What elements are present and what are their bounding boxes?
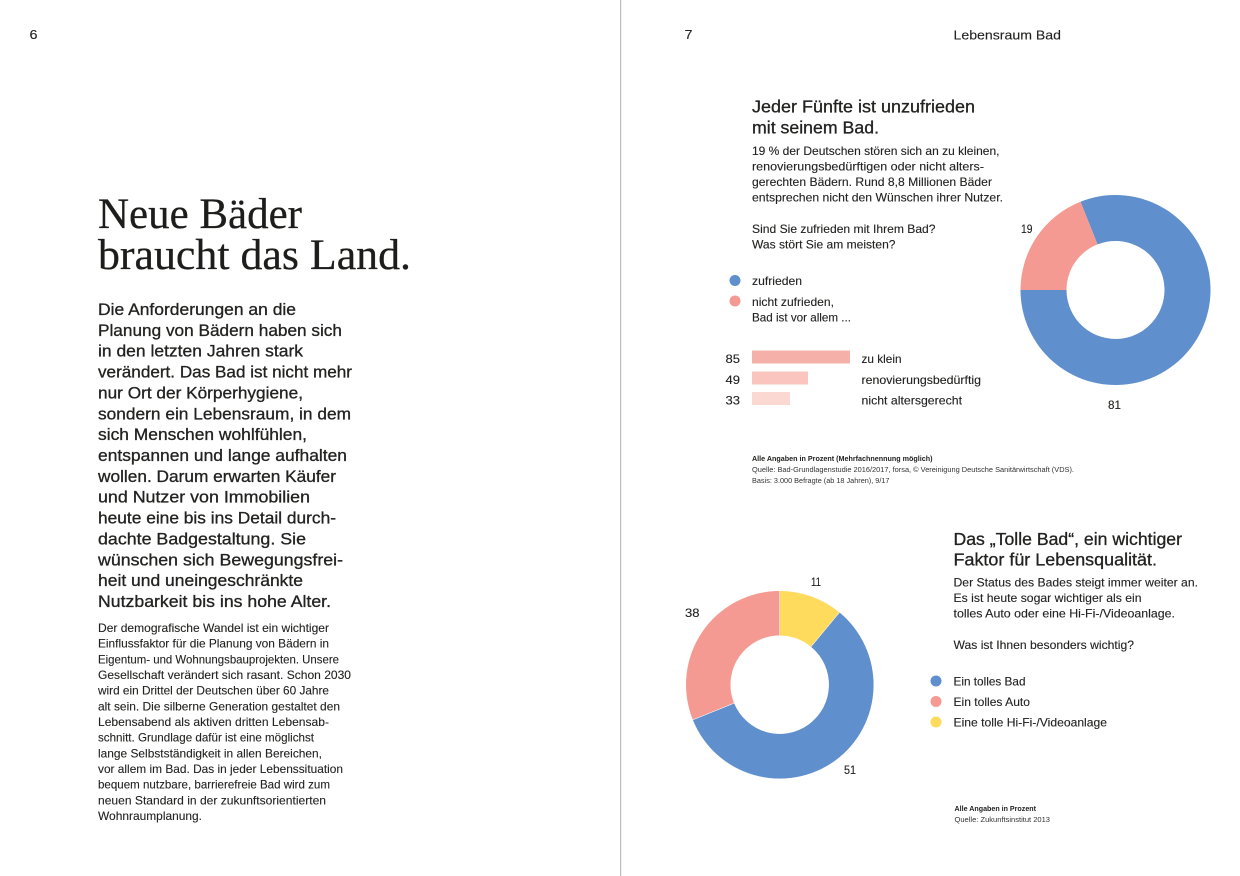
- page number 6: 6: [30, 27, 38, 42]
- description text: [954, 576, 1198, 620]
- body text block: Lebensabend als aktiven dritten Lebensab-: [98, 716, 329, 729]
- intro text block: heute eine bis ins Detail durch-: [98, 510, 336, 528]
- legend: Ein tolles Bad: [954, 674, 1026, 688]
- intro text block: sich Menschen wohlfühlen,: [98, 426, 307, 444]
- bar chart: [726, 350, 981, 408]
- heading: Jeder Fünfte: mit seinem Bad.: [752, 118, 879, 138]
- description text: renovierungsbedürftigen oder nicht alters-: [752, 160, 984, 174]
- bar chart: zu klein: [862, 352, 902, 366]
- body text block: Einflussfaktor für die Planung von Bädern in: [98, 638, 329, 651]
- body text block: vor allem im Bad. Das in jeder Lebenssituation: [98, 763, 343, 776]
- source note: Alle Angaben in Prozent (Mehrfachnennung möglich): [752, 456, 932, 463]
- running header: Lebensraum Bad: [954, 28, 1061, 42]
- description text: tolles Auto oder eine Hi-Fi-/Videoanlage.: [954, 606, 1175, 620]
- description text: entsprechen nicht den Wünschen ihrer Nutzer.: [752, 190, 1003, 204]
- source note: Basis: 3.000 Befragte (ab 18 Jahren), 9/17: [752, 478, 890, 485]
- intro text block: wünschen sich Bewegungsfrei-: [97, 551, 343, 569]
- description text: Der Status des Bades steigt immer weiter an.: [954, 576, 1198, 590]
- source note: [954, 806, 1050, 824]
- bar chart: 49: [726, 373, 740, 387]
- body text block: wird ein Drittel der Deutschen über 60 Jahre: [97, 685, 329, 698]
- heading: Jeder Fünfte: [752, 97, 975, 138]
- source note: [752, 456, 1074, 485]
- source note: Quelle: Zukunftsinstitut 2013: [954, 817, 1050, 824]
- bar chart: nicht altersgerecht: [862, 394, 963, 408]
- intro text block: heit und uneingeschränkte: [98, 572, 303, 590]
- heading: Das Tolle Bad: Faktor für Lebensqualität.: [954, 550, 1157, 570]
- donut chart: [685, 575, 874, 779]
- body text block: Der demografische Wandel ist ein wichtiger: [98, 622, 329, 635]
- body text block: schnitt. Grundlage dafür ist eine möglichst: [98, 732, 315, 745]
- description text: [752, 144, 1003, 204]
- body text block: neuen Standard in der zukunftsorientierten: [98, 794, 326, 807]
- title: Neue Bäder: [98, 191, 302, 238]
- description text: gerechten Bädern. Rund 8,8 Millionen Bäder: [752, 175, 992, 189]
- bar chart: renovierungsbedürftig: [862, 373, 981, 387]
- body text block: Eigentum- und Wohnungsbauprojekten. Unsere: [98, 653, 339, 666]
- intro text block: [97, 301, 353, 611]
- survey question: Was stört Sie am meisten?: [752, 238, 896, 252]
- panel: Jeder Fünfte: [726, 97, 1210, 485]
- donut chart: 19: [1021, 222, 1033, 236]
- body text block: Gesellschaft verändert sich rasant. Schon 2030: [98, 669, 351, 682]
- legend: zufrieden: [752, 274, 802, 288]
- body text block: bequem nutzbare, barrierefreie Bad wird zum: [98, 779, 330, 792]
- survey question: Was ist Ihnen besonders wichtig?: [954, 638, 1134, 652]
- panel: Das Tolle Bad: [685, 529, 1198, 824]
- page number 7: 7: [684, 27, 692, 42]
- donut chart: 11: [811, 575, 821, 589]
- donut chart: [1020, 195, 1210, 412]
- bar chart: 33: [726, 394, 740, 408]
- intro text block: wollen. Darum erwarten Käufer: [97, 468, 337, 486]
- intro text block: Die Anforderungen an die: [98, 301, 296, 319]
- title: [98, 191, 411, 279]
- intro text block: entspannen und lange aufhalten: [98, 447, 347, 465]
- donut chart: 81: [1108, 398, 1121, 412]
- body text block: alt sein. Die silberne Generation gestaltet den: [98, 700, 340, 713]
- intro text block: dachte Badgestaltung. Sie: [98, 530, 306, 548]
- intro text block: nur Ort der Körperhygiene,: [98, 384, 303, 402]
- intro text block: sondern ein Lebensraum, in dem: [98, 405, 351, 423]
- legend: Eine tolle Hi-Fi-/Videoanlage: [954, 716, 1107, 730]
- intro text block: Planung von Bädern haben sich: [98, 322, 342, 340]
- title: braucht das Land.: [98, 232, 411, 279]
- body text block: [97, 622, 351, 823]
- donut chart: 38: [685, 606, 700, 620]
- intro text block: Nutzbarkeit bis ins hohe Alter.: [98, 593, 331, 611]
- intro text block: in den letzten Jahren stark: [98, 343, 304, 361]
- survey question: [752, 222, 936, 252]
- legend: [730, 274, 851, 324]
- description text: 19 % der Deutschen stören sich an zu kleinen,: [752, 144, 1000, 158]
- legend: Bad ist vor allem ...: [752, 310, 851, 324]
- heading: Jeder Fünfte: Jeder Fünfte ist unzufrieden: [752, 97, 975, 117]
- donut chart: 51: [844, 763, 856, 777]
- intro text block: verändert. Das Bad ist nicht mehr: [98, 364, 353, 382]
- survey question: Sind Sie zufrieden mit Ihrem Bad?: [752, 222, 936, 236]
- body text block: lange Selbstständigkeit in allen Bereichen,: [98, 747, 322, 760]
- intro text block: und Nutzer von Immobilien: [98, 489, 310, 507]
- heading: Das Tolle Bad: Das „Tolle Bad“, ein wichtiger: [954, 529, 1182, 549]
- body text block: Wohnraumplanung.: [98, 810, 202, 823]
- legend: nicht zufrieden,: [752, 295, 834, 309]
- source note: Alle Angaben in Prozent: [954, 806, 1037, 813]
- bar chart: 85: [726, 352, 740, 366]
- legend: Ein tolles Auto: [954, 695, 1030, 709]
- heading: Das Tolle Bad: [954, 529, 1182, 570]
- source note: Quelle: Bad-Grundlagenstudie 2016/2017, forsa, © Vereinigung Deutsche Sanitärwirtschaft (VDS).: [752, 466, 1074, 474]
- legend: [930, 674, 1107, 730]
- description text: Es ist heute sogar wichtiger als ein: [954, 591, 1142, 605]
